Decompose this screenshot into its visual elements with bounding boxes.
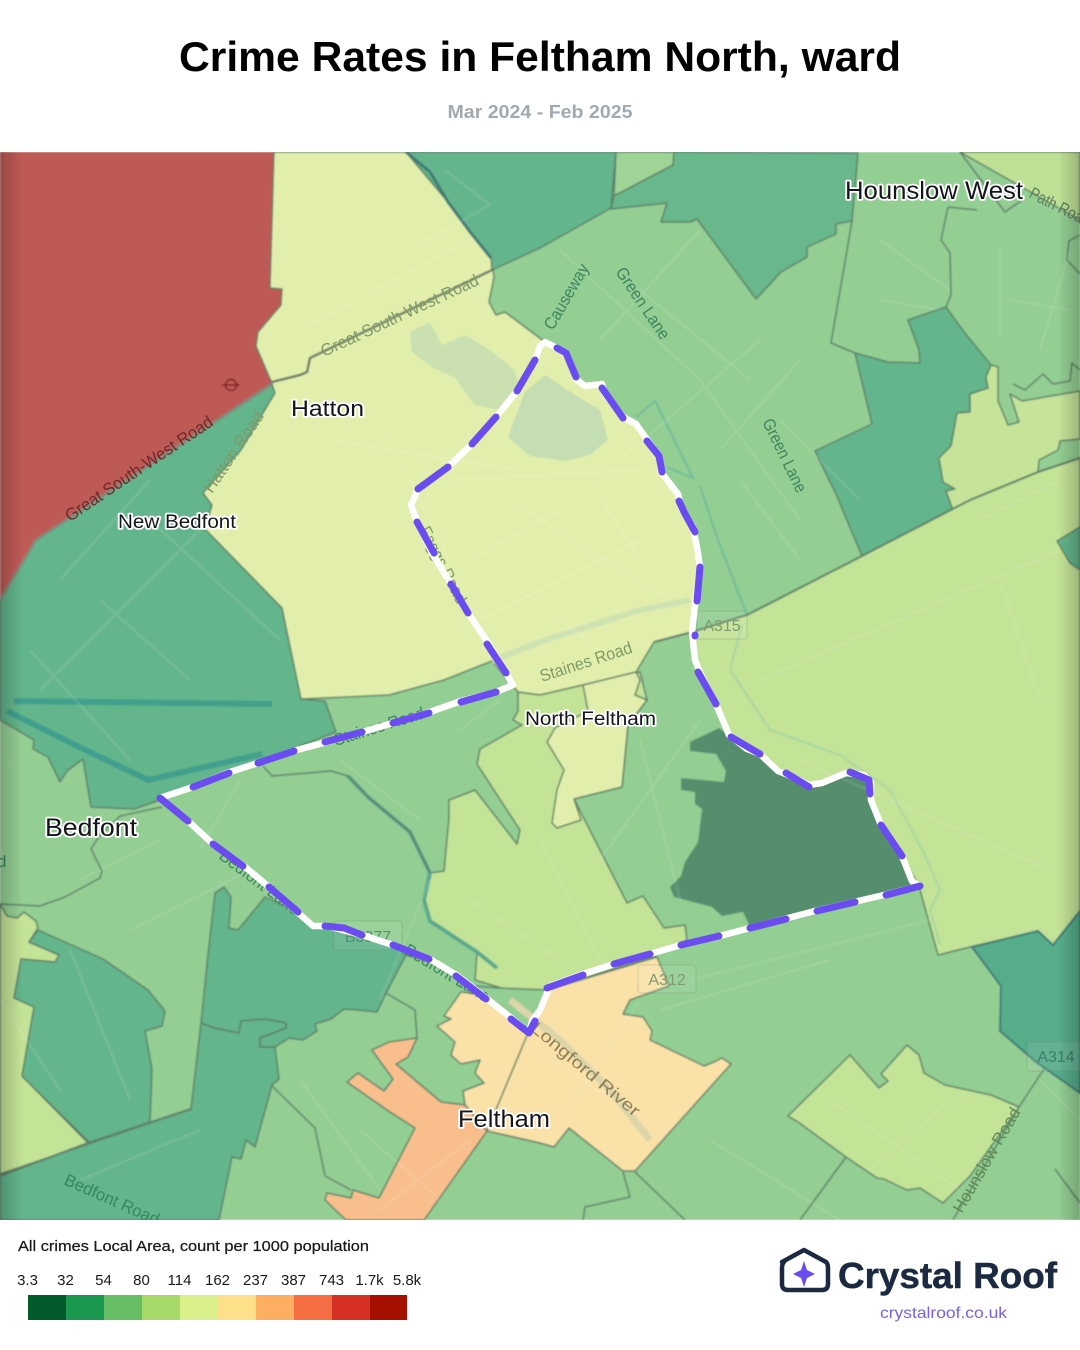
legend colour scale <box>28 1295 407 1320</box>
legend values: 54 <box>95 1272 112 1289</box>
area: red sliver at west edge <box>0 690 12 706</box>
label: Causeway: Causeway <box>540 260 593 333</box>
shield: A312 <box>638 965 696 993</box>
area: north-east lime <box>939 365 1080 510</box>
river on Longford <box>510 1000 650 1140</box>
logo url: crystalroof.co.uk <box>880 1305 1008 1322</box>
label: Green Lane north: Green Lane <box>612 264 674 343</box>
road: red zone boundary <box>0 384 272 600</box>
legend values: 1.7k <box>355 1272 384 1289</box>
area: Feltham cream <box>437 957 731 1171</box>
water: central stream <box>348 776 497 968</box>
place labels <box>45 177 1023 1133</box>
area: west lime <box>0 904 88 1176</box>
label: Faggs Road: Faggs Road <box>415 523 471 607</box>
legend values: 237 <box>243 1272 268 1289</box>
area: central dark south of Bedfont Lane <box>201 887 406 1047</box>
area: top right lime corner <box>960 152 1080 220</box>
shield: B3377 <box>334 921 402 950</box>
water: northern river edge <box>406 152 491 258</box>
label: Bedfont Lane west: Bedfont Lane <box>216 846 304 919</box>
legend values <box>17 1272 422 1289</box>
area: south-west dark <box>0 1019 286 1220</box>
area: south lime block <box>788 1045 1019 1203</box>
map edge vignette <box>0 152 1080 1220</box>
area: top small lighter patch <box>614 152 674 196</box>
area: west dark blob <box>14 930 165 1143</box>
area: east edge dark patch <box>1057 527 1080 570</box>
area: west dark green New Bedfont <box>0 384 336 809</box>
ward boundary: Feltham North <box>160 342 920 1033</box>
place: New Bedfont: New Bedfont <box>118 512 237 533</box>
area: top river dark green <box>406 152 616 270</box>
area: east lime park <box>692 458 1080 955</box>
area: Hatton pale yellow-green <box>203 152 700 699</box>
label: Hounslow Road: Hounslow Road <box>949 1104 1024 1216</box>
place: Feltham: Feltham <box>458 1106 550 1133</box>
area: North Feltham pale yellow <box>547 672 647 828</box>
legend values: 743 <box>319 1272 344 1289</box>
road shields <box>334 611 1080 1071</box>
label: Staines Road west: Staines Road <box>331 703 427 750</box>
shield: B3377: B3377 <box>345 929 391 946</box>
water: tributary <box>636 401 747 615</box>
legend values: 32 <box>57 1272 74 1289</box>
area: ward darkest green <box>670 728 919 931</box>
legend values: 114 <box>168 1272 191 1289</box>
legend values: 80 <box>133 1272 150 1289</box>
lake: north <box>410 322 518 410</box>
shield: A314 <box>1027 1042 1080 1071</box>
place: Bedfont: Bedfont <box>45 814 137 842</box>
area: Feltham orange <box>325 1038 487 1220</box>
title: Crime Rates in Feltham North, ward <box>179 33 901 80</box>
place: North Feltham: North Feltham <box>525 709 656 730</box>
shield: A315: A315 <box>703 618 741 635</box>
area: central lime <box>424 672 687 990</box>
label: Great South-West Road: Great South-West Road <box>62 412 216 525</box>
shield: A312: A312 <box>648 972 686 989</box>
area: north-east dark green <box>815 307 991 556</box>
area: red Heathrow zone <box>0 152 282 600</box>
boundary lines <box>0 152 1080 1220</box>
logo wordmark: Crystal Roof <box>838 1255 1058 1296</box>
icon: house with star <box>782 1250 828 1290</box>
label: Great South West Road: Great South West Road <box>318 271 482 361</box>
legend values: 3.3 <box>17 1272 38 1289</box>
road: A315 long line <box>654 458 1080 642</box>
label: Staines Road east: Staines Road <box>537 638 635 686</box>
water: river in east lime <box>730 625 940 945</box>
label: Bedfont Lane east: Bedfont Lane <box>401 940 493 1006</box>
label: Longford River: Longford River <box>527 1019 644 1121</box>
area: south-east dark river <box>972 911 1080 1093</box>
road: A308 long line <box>0 1109 191 1176</box>
boundary: white casing <box>160 342 919 1033</box>
subtitle: date range: Mar 2024 - Feb 2025 <box>448 102 632 122</box>
label: Green Lane south: Green Lane <box>758 415 811 496</box>
label: Hatton Road: Hatton Road <box>200 408 268 496</box>
place: Hounslow West: Hounslow West <box>845 177 1023 205</box>
shield: A315 <box>697 611 747 639</box>
water: western channels <box>7 701 272 780</box>
place: Hatton: Hatton <box>291 396 364 421</box>
legend title: All crimes Local Area, count per 1000 population <box>18 1238 369 1255</box>
road labels <box>0 184 1080 1229</box>
road network <box>0 170 1080 1220</box>
label: Bedfont Road: Bedfont Road <box>61 1170 162 1229</box>
choropleth map <box>0 152 1080 1229</box>
map base: mid green areas <box>0 152 1080 1220</box>
shield: A314: A314 <box>1037 1049 1075 1066</box>
road: Great South West Road <box>272 270 492 382</box>
lake: east <box>508 375 608 461</box>
legend values: 162 <box>205 1272 230 1289</box>
legend <box>17 1238 422 1320</box>
legend values: 387 <box>281 1272 306 1289</box>
legend values: 5.8k <box>393 1272 422 1289</box>
area: north dark green fill <box>611 152 858 299</box>
logo: Crystal Roof <box>782 1250 1058 1322</box>
boundary: purple dashes <box>160 348 920 1033</box>
canal strip <box>492 600 690 661</box>
icon: underground station <box>222 380 240 390</box>
